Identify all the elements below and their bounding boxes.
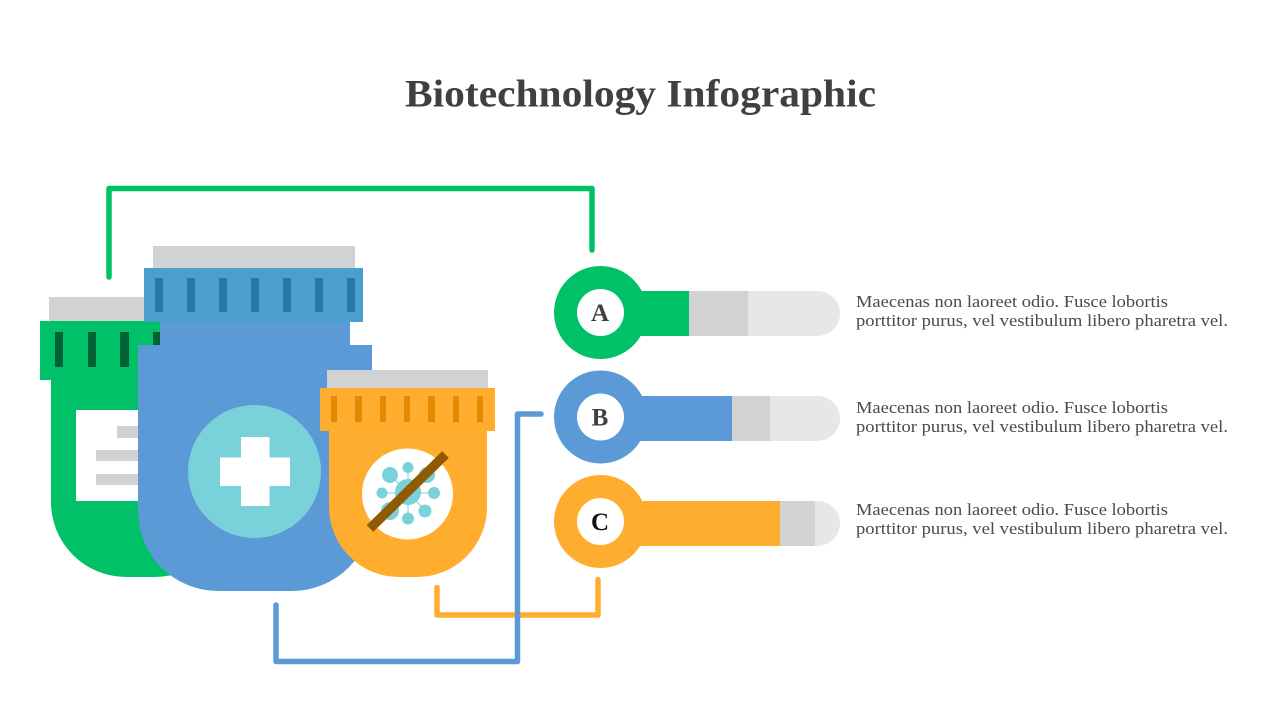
icon: green bottle — [40, 297, 230, 577]
badge C — [554, 475, 647, 568]
row A — [554, 266, 1228, 359]
badge B — [554, 370, 647, 464]
progress bar A — [620, 291, 840, 336]
text A: Maecenas non laoreet odio. Fusce lobortis — [856, 292, 1168, 311]
text C: porttitor purus, vel vestibulum libero pharetra vel. — [856, 519, 1228, 538]
badge A — [554, 266, 647, 359]
icon: orange bottle — [320, 370, 495, 577]
text A: porttitor purus, vel vestibulum libero pharetra vel. — [856, 311, 1228, 330]
text C — [856, 500, 1228, 538]
text B — [856, 398, 1228, 436]
progress bar B — [620, 396, 840, 441]
text B: Maecenas non laoreet odio. Fusce lobortis — [856, 398, 1168, 417]
title: Biotechnology Infographic — [405, 72, 876, 116]
text A — [856, 292, 1228, 330]
badge B: B — [592, 404, 608, 432]
row C — [554, 475, 1228, 568]
row B — [554, 370, 1228, 464]
connector: orange line — [437, 580, 598, 615]
text C: Maecenas non laoreet odio. Fusce lobortis — [856, 500, 1168, 519]
progress bar C — [620, 501, 840, 546]
badge C: C — [591, 509, 609, 536]
icon: slash — [370, 454, 446, 528]
connector: green line — [109, 188, 592, 277]
badge A: A — [591, 300, 609, 327]
connector: blue line — [276, 414, 541, 662]
icon: virus — [376, 462, 440, 524]
text B: porttitor purus, vel vestibulum libero pharetra vel. — [856, 417, 1228, 436]
icon: blue bottle — [138, 246, 372, 591]
